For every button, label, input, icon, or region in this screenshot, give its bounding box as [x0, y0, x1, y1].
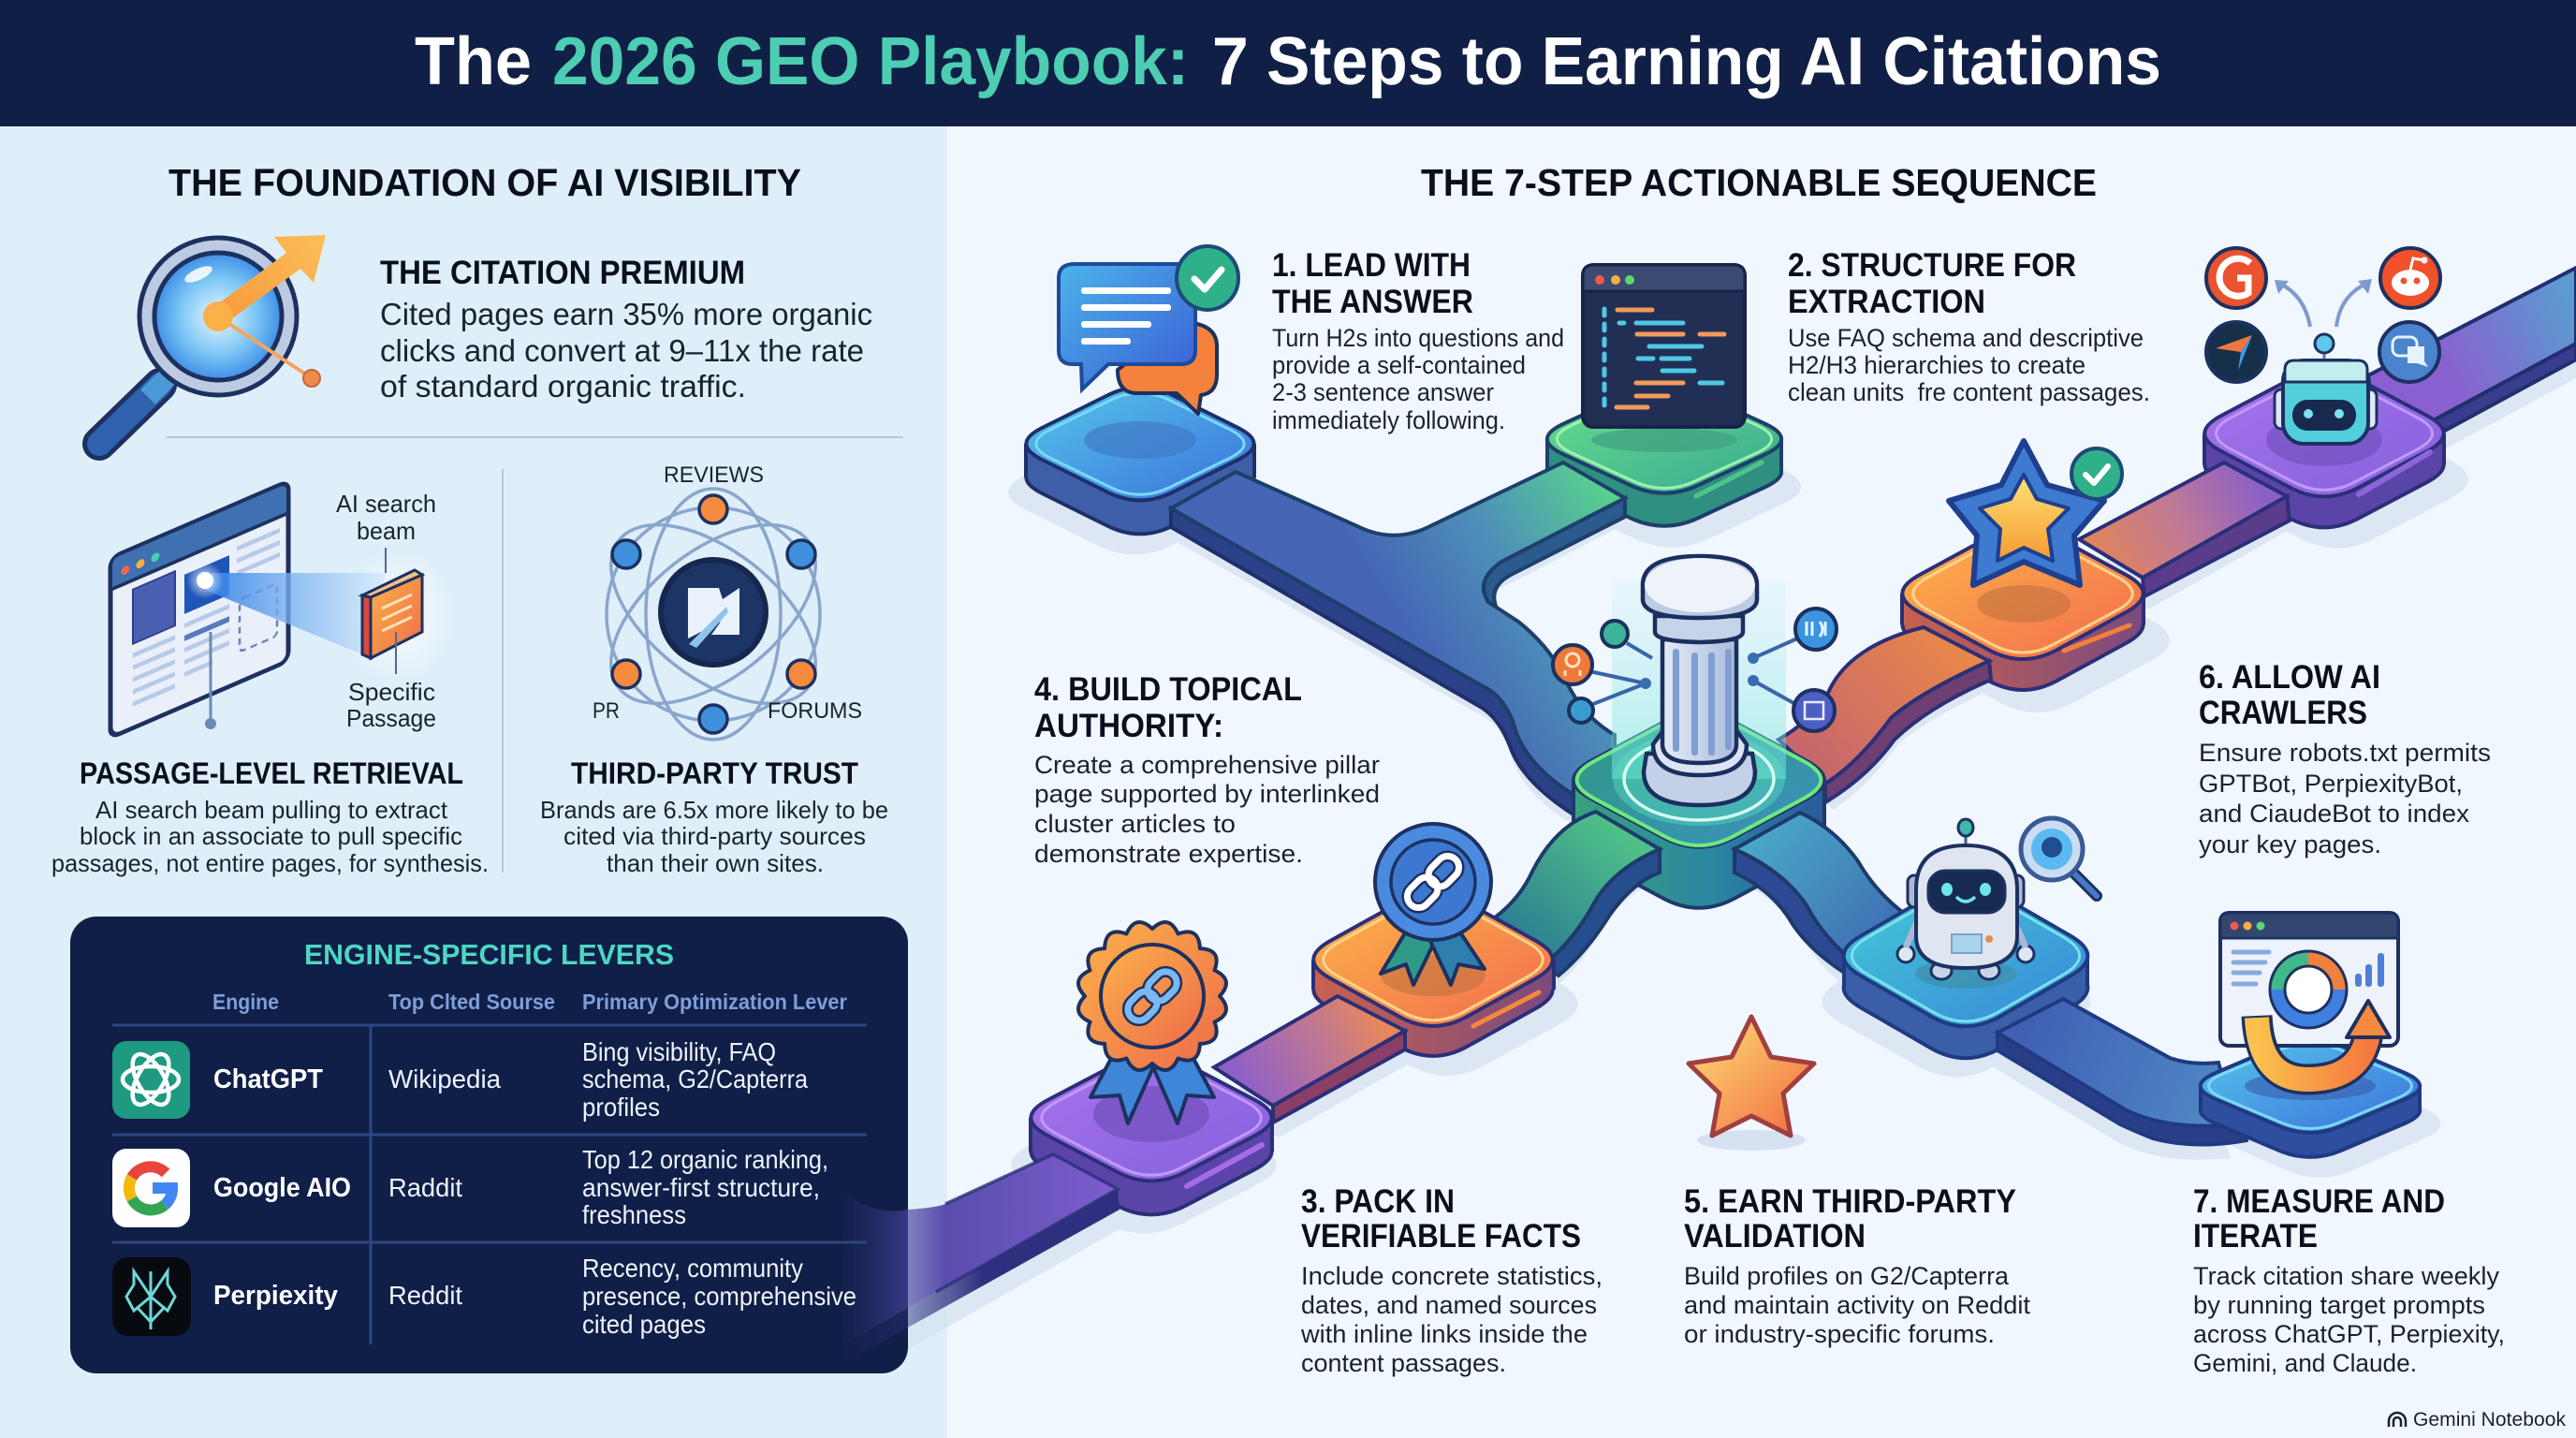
step 7 text: Track citation share weekly	[2193, 1262, 2499, 1290]
section heading: foundation: THE FOUNDATION OF AI VISIBILITY	[168, 161, 801, 204]
callout labels: Passage	[346, 704, 436, 732]
row: ChatGPT: Wikipedia	[388, 1064, 501, 1093]
step 6 text	[2199, 659, 2491, 858]
table headers: Engine	[212, 990, 279, 1014]
step 6 text: CRAWLERS	[2199, 695, 2367, 731]
node labels: PR	[593, 698, 620, 724]
platform: center	[1573, 712, 1824, 908]
diagram: passage-level retrieval	[110, 481, 456, 738]
step 2 text: clean units fre content passages.	[1788, 378, 2150, 406]
table headers: Top Clted Sourse	[388, 990, 555, 1014]
block: third-party trust: than their own sites.	[607, 849, 824, 877]
step 2 text: 2. STRUCTURE FOR	[1788, 247, 2076, 284]
step 7 text: by running target prompts	[2193, 1291, 2485, 1319]
callout labels: AI search	[336, 490, 436, 518]
step 3 text	[1300, 1183, 1603, 1377]
step 4 text: cluster articles to	[1034, 810, 1236, 838]
left panel background	[0, 126, 947, 1438]
beam	[340, 549, 456, 683]
step 4 text: 4. BUILD TOPICAL	[1034, 671, 1302, 708]
platform: green step 2	[1547, 385, 1781, 526]
row: Perplexity: Reddit	[388, 1281, 462, 1310]
block: passage-level retrieval: block in an associate to pull specific	[80, 822, 462, 850]
block: citation premium: clicks and convert at 9–11x the rate	[380, 333, 864, 368]
row: Perplexity: Recency, community	[582, 1254, 803, 1283]
road: orange to purple upper	[2079, 462, 2290, 596]
step 3 text: with inline links inside the	[1300, 1320, 1588, 1348]
step 1 text: provide a self-contained	[1272, 351, 1526, 379]
block: passage-level retrieval	[51, 756, 489, 877]
step 2 text: EXTRACTION	[1788, 284, 1985, 320]
step 5 text: or industry-specific forums.	[1684, 1320, 1995, 1348]
row: ChatGPT: Bing visibility, FAQ	[582, 1037, 776, 1066]
road: center to orange upper	[1778, 627, 1991, 802]
pathway: journey road and platforms	[899, 268, 2576, 1355]
platform: orange lower	[1313, 893, 1554, 1056]
block: passage-level retrieval: AI search beam pulling to extract	[95, 796, 448, 824]
step 6 text: 6. ALLOW AI	[2199, 659, 2380, 696]
icon: browser window	[110, 481, 288, 738]
icon: magnifier with arrow	[99, 235, 326, 444]
table headers: Primary Optimization Lever	[582, 990, 847, 1014]
row: Perplexity: presence, comprehensive	[582, 1282, 856, 1311]
row: Google AIO: answer-first structure,	[582, 1173, 820, 1202]
row: Google AIO: Top 12 organic ranking,	[582, 1145, 828, 1174]
road: step 1 and step 2 to center	[1171, 462, 1625, 816]
road fading into panel	[839, 1154, 1120, 1364]
row: ChatGPT	[213, 1037, 808, 1122]
row: ChatGPT: schema, G2/Capterra	[582, 1064, 808, 1093]
row: ChatGPT: profiles	[582, 1093, 660, 1122]
step 7 text: ITERATE	[2193, 1218, 2318, 1255]
icon: Perplexity	[112, 1257, 191, 1336]
platform: purple upper	[2204, 371, 2444, 527]
icon: robot with magnifier	[1897, 818, 2097, 979]
row: Google AIO: Raddit	[388, 1173, 462, 1202]
row: Perplexity: cited pages	[582, 1310, 706, 1339]
panel: engine-specific levers	[70, 917, 1120, 1373]
step 1 text: 2-3 sentence answer	[1272, 378, 1494, 406]
road: cyan to step 7	[1998, 999, 2247, 1145]
table headers	[212, 990, 847, 1014]
title: The	[415, 24, 532, 99]
road: center to cyan	[1734, 813, 1910, 976]
row: Google AIO	[213, 1145, 828, 1229]
panel heading: ENGINE-SPECIFIC LEVERS	[304, 938, 674, 971]
step 5 text: Build profiles on G2/Capterra	[1684, 1262, 2010, 1290]
step 1 text: 1. LEAD WITH	[1272, 247, 1471, 284]
step 7 text	[2193, 1183, 2505, 1377]
callout labels	[336, 490, 436, 732]
step 5 text	[1684, 1183, 2030, 1348]
header band	[0, 0, 2576, 126]
brand hub	[661, 560, 766, 665]
row: ChatGPT: ChatGPT	[213, 1064, 323, 1094]
node labels	[593, 462, 862, 724]
icon: analytics dashboard with loop arrow	[2220, 913, 2398, 1079]
block: passage-level retrieval: PASSAGE-LEVEL RETRIEVAL	[80, 756, 463, 790]
icon: gold star	[1689, 1017, 1814, 1151]
icon: Google	[112, 1149, 190, 1227]
step 3 text: Include concrete statistics,	[1301, 1262, 1603, 1290]
step 3 text: 3. PACK IN	[1301, 1183, 1455, 1220]
step 5 text: and maintain activity on Reddit	[1684, 1291, 2030, 1319]
block: third-party trust: THIRD-PARTY TRUST	[571, 756, 858, 790]
title	[415, 24, 2161, 99]
icon: crawler robot with platforms	[2206, 248, 2440, 444]
step 1 text: Turn H2s into questions and	[1272, 324, 1564, 352]
block: passage-level retrieval: passages, not entire pages, for synthesis.	[51, 849, 489, 877]
diagram: third-party trust network	[579, 462, 862, 740]
road: purple lower to orange lower	[1214, 996, 1405, 1123]
step 1 text	[1272, 247, 1564, 434]
icon: pillar hub	[1553, 556, 1837, 826]
block: third-party trust: Brands are 6.5x more likely to be	[540, 796, 888, 824]
step 1 text: immediately following.	[1272, 406, 1505, 434]
pillar connected nodes	[1589, 638, 1797, 704]
block: third-party trust	[540, 756, 888, 877]
row: Google AIO: Google AIO	[213, 1173, 351, 1203]
step 4 text: Create a comprehensive pillar	[1034, 751, 1380, 779]
block: citation premium: THE CITATION PREMIUM	[380, 255, 745, 291]
step 3 text: content passages.	[1301, 1349, 1506, 1377]
platform: blue step 1	[1026, 388, 1254, 534]
step 5 text: VALIDATION	[1684, 1218, 1866, 1255]
block: citation premium: of standard organic traffic.	[380, 369, 746, 404]
pillar column	[1643, 556, 1757, 805]
step 3 text: VERIFIABLE FACTS	[1301, 1218, 1581, 1255]
node labels: FORUMS	[768, 698, 862, 724]
step 7 text: 7. MEASURE AND	[2193, 1183, 2445, 1220]
step 2 text: Use FAQ schema and descriptive	[1788, 324, 2144, 352]
pathway shadows	[899, 300, 2576, 1355]
callout labels: beam	[357, 517, 416, 545]
platform: cyan	[1844, 886, 2087, 1058]
step 2 text: H2/H3 hierarchies to create	[1788, 351, 2086, 379]
road: center to orange lower	[1488, 812, 1660, 976]
step 4 text: page supported by interlinked	[1034, 780, 1380, 808]
callout labels: Specific	[348, 678, 435, 706]
step 4 text: demonstrate expertise.	[1034, 840, 1303, 868]
block: citation premium	[380, 255, 872, 404]
row: Perplexity	[213, 1254, 856, 1339]
block: third-party trust: cited via third-party sources	[564, 822, 866, 850]
step 6 text: and CiaudeBot to index	[2199, 800, 2470, 828]
icon: extracted passage	[362, 570, 422, 658]
icon: orange rosette	[1078, 922, 1226, 1123]
icon: blue star with check	[1949, 441, 2122, 585]
step 5 text: 5. EARN THIRD-PARTY	[1684, 1183, 2016, 1220]
step 4 text: AUTHORITY:	[1034, 708, 1223, 744]
watermark: Gemini Notebook	[2413, 1409, 2566, 1431]
block: citation premium: Cited pages earn 35% more organic	[380, 297, 872, 331]
step 3 text: dates, and named sources	[1301, 1291, 1597, 1319]
platform: purple lower	[1031, 1055, 1272, 1214]
title: 7 Steps to Earning AI Citations	[1212, 24, 2161, 99]
icon: ChatGPT	[112, 1041, 190, 1119]
step 7 text: across ChatGPT, Perpiexity,	[2193, 1320, 2505, 1348]
road: to off-page right	[2368, 268, 2576, 467]
step 1 text: THE ANSWER	[1272, 284, 1473, 320]
row: Google AIO: freshness	[582, 1200, 686, 1229]
platform: blue step 7	[2201, 1039, 2420, 1157]
node labels: REVIEWS	[664, 462, 764, 488]
row: Perplexity: Perpiexity	[213, 1281, 338, 1311]
platform: orange upper	[1902, 528, 2144, 690]
section heading: sequence: THE 7-STEP ACTIONABLE SEQUENCE	[1421, 161, 2097, 204]
step 6 text: GPTBot, PerpiexityBot,	[2199, 770, 2463, 798]
step 4 text	[1034, 671, 1380, 868]
icon: blue medal	[1375, 824, 1491, 985]
title: 2026 GEO Playbook:	[552, 24, 1189, 99]
step 2 text	[1788, 247, 2150, 406]
network nodes	[612, 495, 815, 733]
icon: chat bubbles with check	[1059, 246, 1238, 414]
step 6 text: your key pages.	[2199, 830, 2381, 858]
step 7 text: Gemini, and Claude.	[2193, 1349, 2417, 1377]
icon: code window	[1583, 265, 1745, 427]
step 6 text: Ensure robots.txt permits	[2199, 739, 2491, 767]
